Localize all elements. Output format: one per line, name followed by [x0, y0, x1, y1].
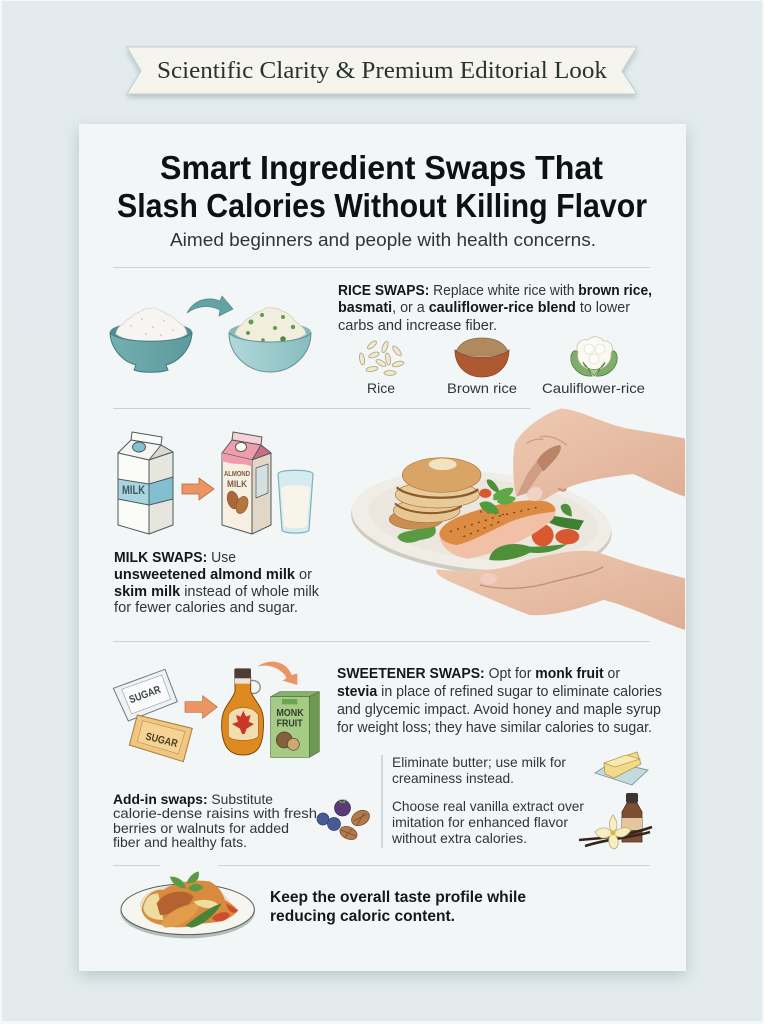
icon: almond milk carton: ALMOND [224, 469, 250, 478]
icon: cauliflower rice bowl [229, 308, 311, 372]
sweetener swaps text [337, 666, 662, 736]
add-in swaps text: berries or walnuts for added [113, 820, 289, 836]
ribbon banner: Scientific Clarity & Premium Editorial Look [157, 58, 607, 84]
butter tip text: Eliminate butter; use milk for [392, 754, 566, 770]
icon: almond milk carton: MILK [227, 479, 247, 490]
sweetener swaps text: SWEETENER SWAPS: Opt for monk fruit or [337, 666, 620, 682]
milk swap illustration [118, 432, 313, 534]
vanilla tip text: imitation for enhanced flavor [392, 814, 568, 830]
vanilla tip text: Choose real vanilla extract over [392, 798, 584, 814]
icon: finished dish [120, 872, 255, 938]
icon: monk fruit box: FRUIT [277, 719, 303, 730]
tomatoes and greens behind salmon [397, 489, 584, 546]
closing message: reducing caloric content. [270, 908, 455, 925]
icon: sugar packets: SUGAR [144, 731, 179, 750]
icon: sugar packets [113, 669, 192, 762]
arrow: curved orange [258, 662, 297, 685]
rice icon labels: Rice [367, 380, 395, 396]
arrow: teal curved [187, 296, 233, 316]
vanilla tip text: without extra calories. [391, 830, 527, 846]
subtitle: Aimed beginners and people with health concerns. [170, 230, 596, 250]
sweetener swaps text: for weight loss; they have similar calories to sugar. [337, 720, 652, 736]
sweetener swaps text: stevia in place of refined sugar to eliminate calories [337, 684, 662, 700]
plate [347, 461, 616, 585]
milk swaps text: skim milk instead of whole milk [114, 584, 320, 600]
butter tip text: creaminess instead. [392, 770, 514, 786]
icon: milk carton: MILK [122, 485, 146, 497]
rice swap illustration [110, 296, 311, 372]
icon: white rice bowl [110, 308, 192, 372]
rice icon labels: Brown rice [447, 380, 517, 396]
add-in swaps text [113, 791, 317, 850]
butter tip text [392, 754, 566, 786]
rice swaps text: basmati, or a cauliflower-rice blend to lower [338, 300, 630, 316]
icon: milk carton [118, 432, 173, 534]
closing message [270, 889, 526, 925]
icon: sugar packets: SUGAR [128, 684, 163, 706]
herb leaves on salmon [479, 479, 567, 561]
icon: berries and walnuts [317, 799, 372, 842]
ribbon banner [127, 47, 637, 94]
rice icon labels [367, 380, 645, 396]
milk swaps text: MILK SWAPS: Use [114, 550, 236, 566]
arrow: orange [182, 478, 214, 500]
title: Slash Calories Without Killing Flavor [117, 187, 647, 224]
icon: monk fruit box [271, 692, 319, 757]
rice swaps text: RICE SWAPS: Replace white rice with brown rice, [338, 283, 652, 299]
icon: maple syrup bottle [222, 668, 264, 755]
icon: monk fruit box: MONK [276, 708, 304, 719]
title: Smart Ingredient Swaps That [160, 149, 603, 186]
vanilla tip text [391, 798, 584, 846]
icon: butter on dish [595, 752, 648, 785]
add-in swaps text: fiber and healthy fats. [113, 834, 247, 850]
icon: glass of milk [278, 470, 313, 533]
main panel [79, 124, 686, 971]
milk swaps text: for fewer calories and sugar. [114, 600, 298, 616]
rice icon labels: Cauliflower-rice [542, 380, 645, 396]
milk swaps text [114, 550, 320, 616]
icon: brown rice bowl [455, 338, 509, 377]
title [117, 149, 647, 224]
hand: bottom [436, 551, 685, 630]
closing message: Keep the overall taste profile while [270, 889, 526, 906]
icon: vanilla extract and flower [579, 793, 652, 849]
hand: top [513, 408, 685, 504]
icon: rice grains [359, 340, 404, 375]
sweetener swaps text: and glycemic impact. Avoid honey and maple syrup [337, 702, 661, 718]
pancake stack [389, 458, 481, 529]
photo: hands holding salmon plate [347, 408, 685, 630]
sweetener swap illustration [113, 662, 319, 762]
icon: almond milk carton [222, 432, 271, 534]
add-in swaps text: Add-in swaps: Substitute [113, 791, 273, 807]
rice swaps text: carbs and increase fiber. [338, 318, 497, 334]
salmon fillet [439, 500, 555, 559]
arrow: orange [185, 696, 217, 718]
rice swaps text [338, 283, 652, 334]
icon: cauliflower [571, 337, 617, 376]
milk swaps text: unsweetened almond milk or [114, 567, 312, 583]
add-in swaps text: calorie-dense raisins with fresh [113, 805, 317, 821]
